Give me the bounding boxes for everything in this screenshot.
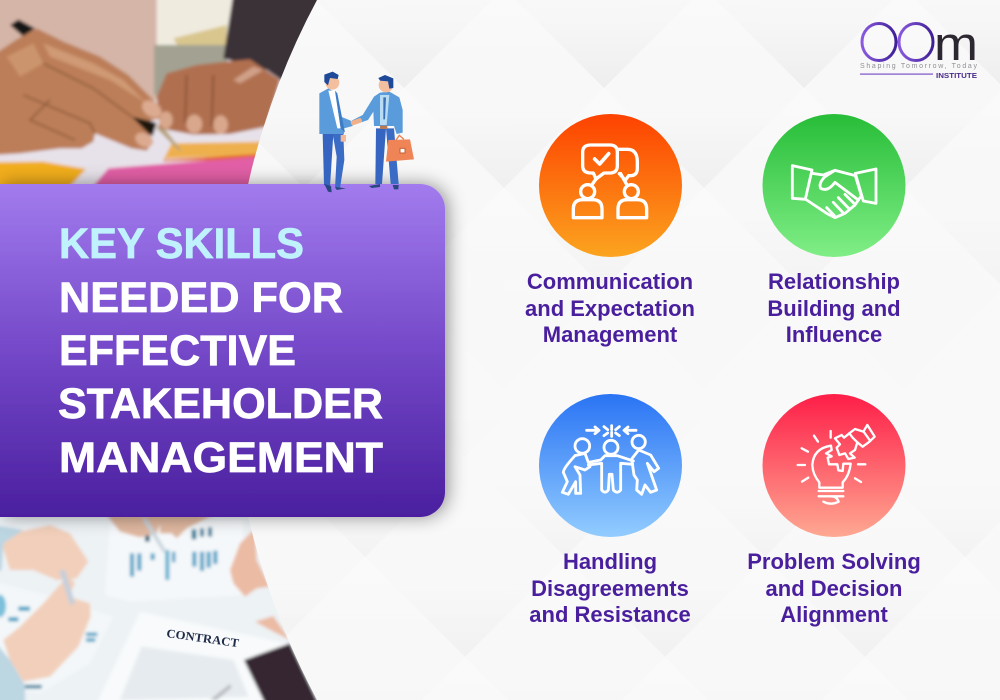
- label: and Expectation: [525, 296, 695, 321]
- yellow sticky note: [163, 142, 262, 160]
- label: Management: [543, 322, 678, 347]
- title: STAKEHOLDER: [58, 380, 383, 428]
- briefcase: [396, 135, 404, 140]
- title: NEEDED FOR: [59, 274, 343, 322]
- label: and Resistance: [529, 602, 691, 627]
- right hand: [157, 59, 280, 135]
- photo: business meeting with contract: [0, 517, 317, 700]
- logo: OOm Institute: Shaping Tomorrow, Today: [860, 63, 978, 70]
- hands at top: [107, 515, 163, 537]
- photo panels clipped by curve: [0, 0, 327, 700]
- tablet: [244, 643, 320, 700]
- logo: OOm Institute: INSTITUTE: [936, 71, 977, 80]
- left hand: [0, 28, 162, 155]
- chart paper: [156, 560, 157, 561]
- right man: [350, 75, 414, 189]
- label: Influence: [786, 322, 882, 347]
- label: [529, 549, 691, 627]
- title: EFFECTIVE: [59, 327, 296, 375]
- left hand upper: [2, 525, 88, 580]
- logo: OOm Institute: m: [934, 17, 978, 70]
- skill: handling disagreements and resistance: [529, 394, 691, 627]
- skill: problem solving and decision alignment: [747, 394, 921, 627]
- title: [58, 220, 383, 482]
- title: MANAGEMENT: [59, 434, 383, 482]
- icon: red circle with light bulb and puzzle: [762, 394, 906, 537]
- logo: OOm Institute: [860, 17, 978, 80]
- label: Building and: [767, 296, 901, 321]
- left man: [319, 72, 353, 192]
- skill: communication and expectation management: [525, 114, 695, 347]
- label: Handling: [563, 549, 657, 574]
- icon: green circle with handshake: [762, 114, 906, 257]
- photo text: contract heading: CONTRACT: [166, 626, 240, 650]
- orange note: [0, 160, 87, 184]
- label: and Decision: [766, 576, 902, 601]
- contract paper: [95, 612, 287, 700]
- title: KEY SKILLS: [59, 220, 304, 268]
- photo: hands writing on sticky notes: [0, 0, 327, 193]
- chart bars: [130, 527, 217, 580]
- left lower document: [0, 582, 113, 693]
- label: Disagreements: [531, 576, 689, 601]
- illustration: two businessmen shaking hands: [319, 72, 414, 192]
- pink note: [93, 154, 256, 184]
- panel: purple title card: [0, 184, 445, 517]
- label: Problem Solving: [747, 549, 921, 574]
- icon: blue circle with people resolving conflict: [539, 394, 682, 537]
- label: Communication: [527, 269, 693, 294]
- left hand lower: [3, 575, 91, 682]
- label: Relationship: [768, 269, 900, 294]
- label: [525, 269, 695, 347]
- pen: [10, 19, 35, 37]
- icon: orange circle with chat bubbles and people: [539, 114, 682, 257]
- paper: [0, 123, 267, 190]
- right hand: [230, 528, 270, 597]
- label: [747, 549, 921, 627]
- skill: relationship building and influence: [762, 114, 906, 347]
- label: Alignment: [780, 602, 888, 627]
- label: [767, 269, 901, 347]
